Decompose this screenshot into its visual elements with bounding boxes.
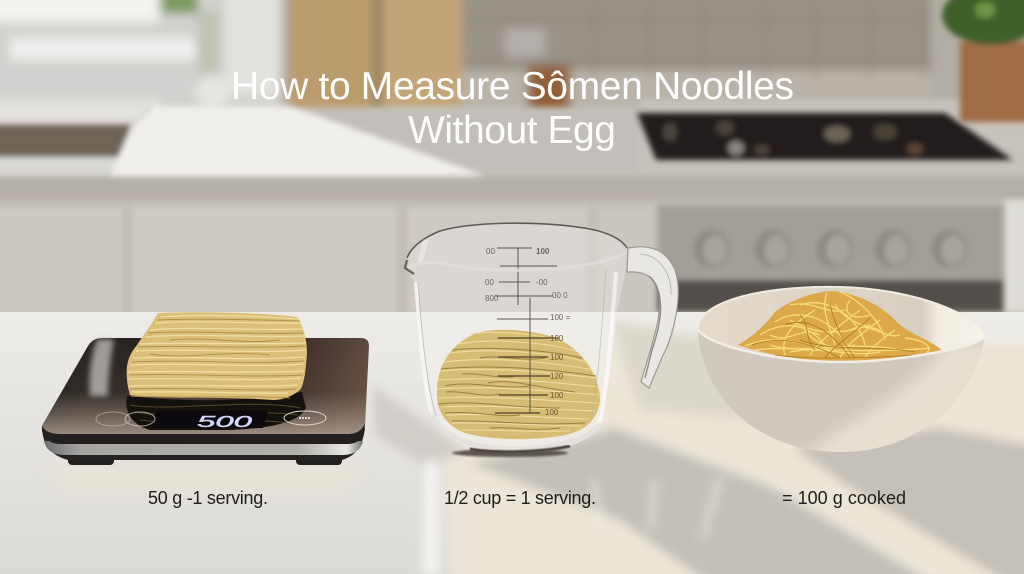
scale top plate xyxy=(42,338,369,436)
title xyxy=(231,65,794,152)
glass measuring cup with noodles: -00 xyxy=(536,278,548,287)
glass measuring cup with noodles: 00 xyxy=(486,247,495,256)
caption: bowl: = 100 g cooked xyxy=(782,488,906,508)
measurement marks xyxy=(495,248,558,413)
glass measuring cup with noodles: 100 xyxy=(550,334,564,343)
glass measuring cup with noodles: 00 xyxy=(485,278,494,287)
glass measuring cup with noodles: 120 xyxy=(550,372,564,381)
raw noodle block xyxy=(127,312,307,400)
plant and pot xyxy=(942,0,1024,122)
countertop light and shadow xyxy=(48,320,1024,574)
glass measuring cup with noodles: 100 xyxy=(536,247,550,256)
blurred kitchen background xyxy=(0,0,1024,316)
cup body xyxy=(407,223,627,452)
display xyxy=(152,411,268,431)
glass measuring cup with noodles: 100 xyxy=(545,408,559,417)
glass measuring cup with noodles: 800 xyxy=(485,294,499,303)
glass measuring cup with noodles: 100 xyxy=(550,391,564,400)
marble countertop xyxy=(0,312,1024,574)
oven panel with knobs xyxy=(658,205,1003,312)
bowl rim xyxy=(698,330,985,362)
cooked noodle mound xyxy=(738,291,942,361)
glass measuring cup with noodles xyxy=(405,223,678,457)
bowl inner xyxy=(698,287,985,362)
noodle reflection xyxy=(126,392,306,430)
stove xyxy=(637,113,1013,160)
glass measuring cup with noodles: 100 xyxy=(550,353,564,362)
scale side xyxy=(42,428,365,460)
glass measuring cup with noodles: 00 0 xyxy=(552,291,568,300)
bowl outer xyxy=(698,330,985,452)
title: How to Measure Sômen Noodles xyxy=(231,65,794,108)
ceramic bowl with cooked noodles xyxy=(698,286,984,452)
scale buttons xyxy=(96,411,326,426)
cup glass highlights xyxy=(405,223,627,452)
cup handle xyxy=(627,247,678,388)
caption: cup: 1/2 cup = 1 serving. xyxy=(444,488,596,508)
scale feet xyxy=(68,456,342,465)
caption: scale: 50 g -1 serving. xyxy=(148,488,268,508)
title: Without Egg xyxy=(408,109,616,152)
kitchen scale with noodles xyxy=(42,312,369,465)
glass measuring cup with noodles: 100 = xyxy=(550,313,571,322)
display: 500 xyxy=(197,414,252,431)
noodle mound in cup xyxy=(437,330,600,439)
